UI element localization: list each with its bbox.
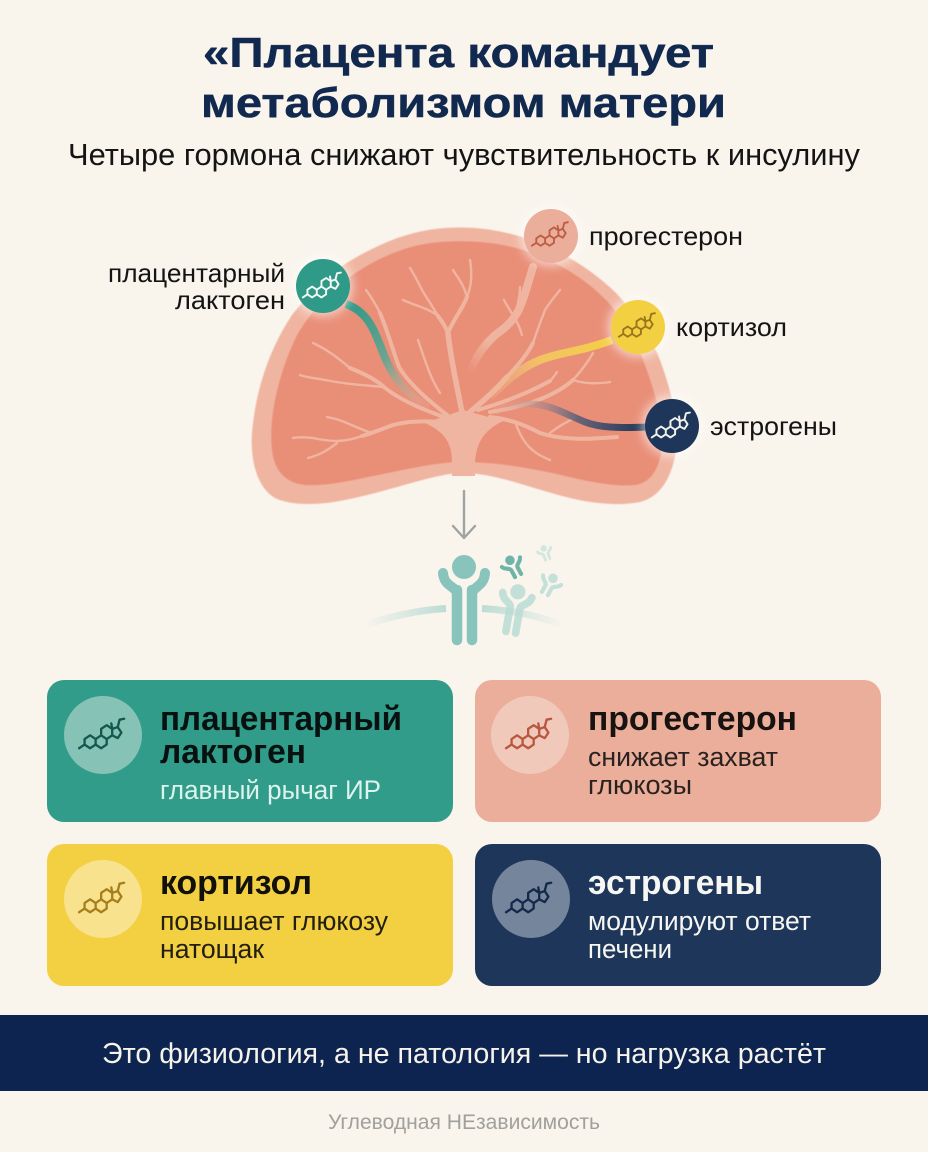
card text: печени [588,934,672,964]
insulin receptor [443,555,485,640]
antibody dark [499,551,527,580]
subtitle: Четыре гормона снижают чувствительность к инсулину [68,137,860,172]
small antibodies [496,543,564,635]
cell membrane [366,608,562,625]
title: метаболизмом матери [201,79,726,126]
card: placental lactogen [47,680,453,822]
hormone path: lactogen [346,304,428,408]
card text [588,864,811,964]
hormone path: progesterone [470,267,533,372]
label: cortisol: кортизол [676,312,787,342]
card text: снижает захват [588,742,778,772]
placenta inner tissue [271,241,662,485]
placenta outer rim [252,227,677,504]
antibody pale top [536,543,554,562]
card text: плацентарный [160,700,402,738]
card icon: molecule [64,860,142,938]
card: progesterone [475,680,881,822]
label: placental lactogen: лактоген [175,285,285,315]
bottom banner: Это физиология, а не патология — но нагрузка растёт [102,1038,826,1070]
hormone path: cortisol [490,340,612,397]
card text: прогестерон [588,700,797,738]
title [201,29,726,126]
card text: модулируют ответ [588,906,811,936]
hormone path: estrogens [495,404,648,427]
card text: повышает глюкозу [160,906,388,936]
hormone node: cortisol [608,297,668,357]
card text: эстрогены [588,864,763,902]
antibody pale right [536,569,564,598]
card text: лактоген [160,733,306,771]
card icon: molecule [64,696,142,774]
antibody bound [496,582,534,635]
card text [160,700,402,805]
arrow down [453,491,475,538]
label: placental lactogen: плацентарный [108,258,285,288]
hormone node: progesterone [521,206,581,266]
footer credit: Углеводная НЕзависимость [328,1111,600,1134]
label: estrogens: эстрогены [710,411,837,441]
card: cortisol [47,844,453,986]
card: estrogens [475,844,881,986]
card text: глюкозы [588,770,692,800]
vessel tree [293,260,617,460]
hormone node: placental lactogen [293,256,353,316]
card text: натощак [160,934,264,964]
title: «Плацента командует [203,29,714,76]
card text: главный рычаг ИР [160,775,381,805]
hormone node: estrogens [642,396,702,456]
card text [160,864,388,964]
card text: кортизол [160,864,312,902]
placenta trunk [425,410,503,476]
label: placental lactogen [108,258,285,315]
card icon: molecule [492,860,570,938]
bottom banner [0,1015,928,1091]
label: progesterone: прогестерон [589,221,743,251]
placenta illustration [252,227,677,504]
card text [588,700,797,800]
card icon: molecule [491,696,569,774]
